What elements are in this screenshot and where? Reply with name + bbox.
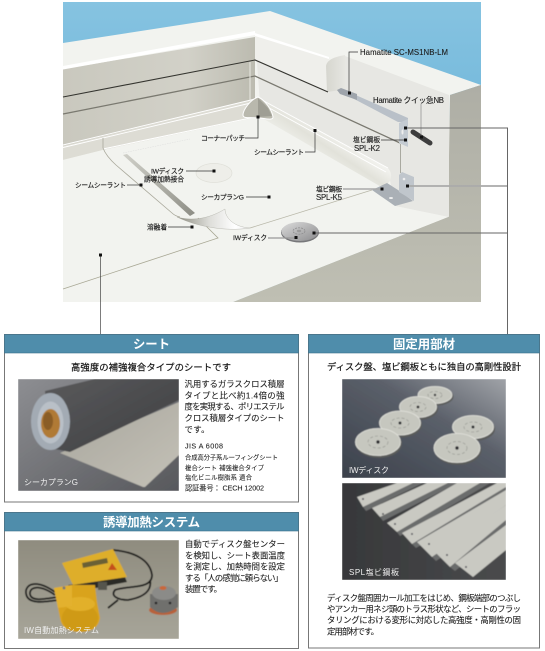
body text: 装置です。 [185,584,222,594]
body text: ディスク盤周囲カール加工をはじめ、鋼板端部のつぶし [327,593,521,603]
subheading: 高強度の補強複合タイプのシートです [71,361,231,372]
body text: を測定し、加熱時間を設定 [185,562,286,572]
specification text: 塩化ビニル樹脂系 適合 [185,472,253,482]
icon: peeled sheet curl [177,209,250,229]
callout labels: 誘導加熱接合 [144,174,184,184]
specification text: JIS A 6008 [185,442,223,450]
body text: クロス積層タイプのシート [184,413,284,423]
icon: corner patch [243,97,273,119]
specification text [185,442,278,492]
body text: タイプと比べ約1.4倍の強 [184,390,285,400]
callout labels: 塩ビ鋼板 [316,184,342,194]
photo caption: SPL塩ビ鋼板 [349,567,399,577]
body text: を検知し、シート表面温度 [185,550,286,560]
callout labels [75,48,448,242]
illustration: roof cross-section [63,2,508,335]
specification text: 合成高分子系ルーフィングシート [185,452,278,462]
photo: sheet roll [18,379,179,491]
body text [184,379,285,434]
panel heading: sheet [4,334,298,353]
subheading: ディスク盤、塩ビ鋼板ともに独自の高剛性設計 [327,361,522,372]
panel: induction heating system [4,512,298,648]
panel: fixing materials [308,334,540,648]
icon: anchor screw [413,132,430,143]
callout labels: SPL-K2 [354,144,380,153]
callout labels: IWディスク [233,233,267,242]
photo: heating equipment [18,540,179,639]
panel heading: fixing materials: 固定用部材 [393,336,455,352]
specification text: 複合シート 補強複合タイプ [185,463,265,472]
callout labels: Hamatite クイッ急NB [373,95,444,105]
callout labels: シームシーラント [254,148,304,156]
panel heading: induction heating [4,512,298,531]
panel: sheet [4,334,298,502]
callout labels: コーナーパッチ [201,134,245,142]
callout labels: シームシーラント [75,182,126,190]
callout labels: SPL-K5 [316,193,343,202]
panel heading: fixing materials [308,334,540,353]
photo: SPL steel strips [342,483,506,580]
photo caption: シーカプランG [24,478,78,487]
photo caption: IW自動加熱システム [24,625,99,635]
body text: 汎用するガラスクロス積層 [184,379,284,389]
body text: 自動でディスク盤センター [185,539,285,549]
body text [327,593,521,636]
body text: 定用部材です。 [327,626,379,636]
leader lines [100,52,508,335]
body text: する「人の感覚に頼らない」 [185,573,283,583]
callout labels: Hamatite SC-MS1NB-LM [360,48,448,57]
callout labels: IWディスク [151,166,184,176]
callout labels: シーカプランG [201,194,244,202]
icon: induction weld spot [196,164,232,182]
body text [185,539,286,594]
body text: 度を実現する、ポリエステル [184,402,284,412]
icon: SPL-K2 bracket and rail [337,88,408,173]
body text: タリングにおける変形に対応した高強度・高剛性の固 [327,615,521,625]
panel heading: sheet: シート [133,338,170,352]
icon: IW disc [281,222,319,242]
callout labels: 塩ビ鋼板 [353,135,380,144]
photo caption: IWディスク [349,465,389,475]
specification text: 認証番号： CECH 12002 [185,484,264,492]
body text: です。 [184,424,210,434]
photo: IW discs [342,379,506,478]
callout labels: 溶融着 [147,222,167,232]
panel heading: induction heating: 誘導加熱システム [103,514,200,530]
icon: SPL-K5 bracket [372,172,414,206]
icon: parapet cap end [326,55,345,92]
body text: やアンカー用ネジ頭のトラス形状など、シートのフラッ [327,604,521,614]
